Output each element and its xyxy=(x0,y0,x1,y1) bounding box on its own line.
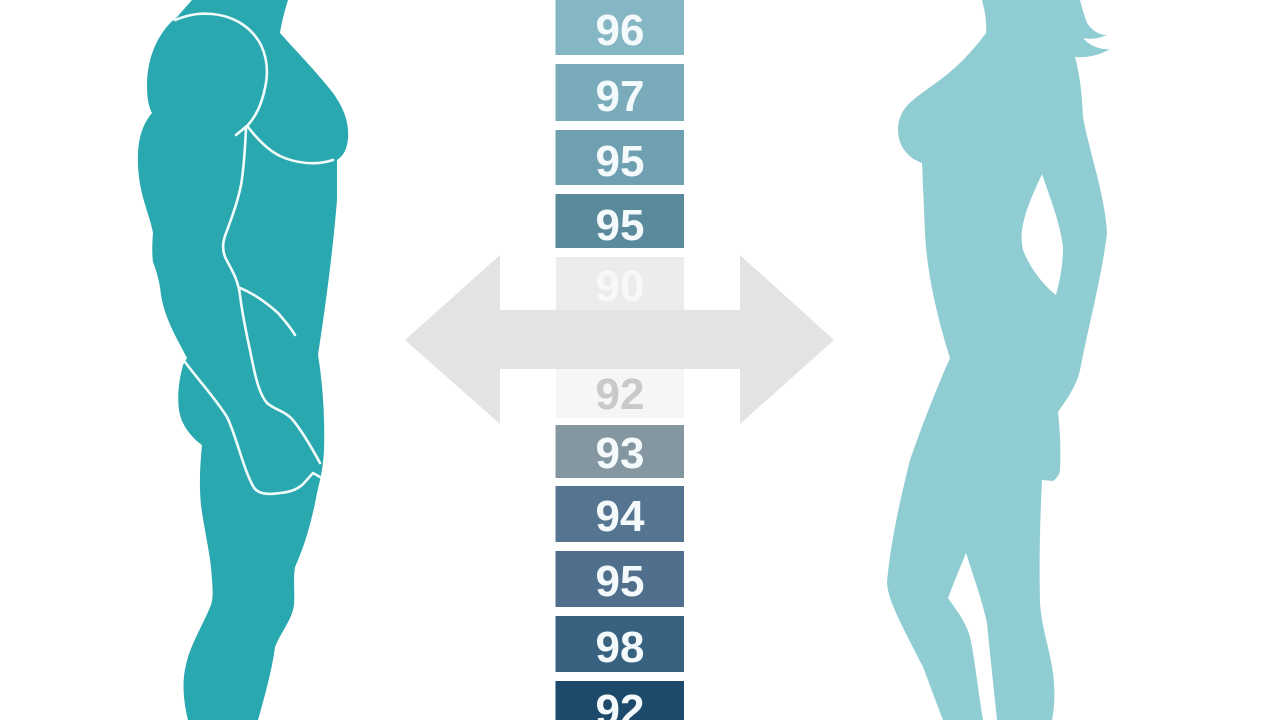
bar 92 navy xyxy=(556,681,684,720)
bar 95 dark xyxy=(556,194,684,250)
body contour lines xyxy=(175,14,333,494)
bar 95 blue xyxy=(556,551,684,607)
bar 97: 97 xyxy=(596,72,644,121)
bar 95 blue: 95 xyxy=(596,557,644,606)
double-headed arrow xyxy=(405,255,834,424)
bar 96: 96 xyxy=(596,6,644,55)
bar 94: 94 xyxy=(596,492,645,541)
bar 95: 95 xyxy=(596,137,644,186)
silhouette body xyxy=(138,0,348,720)
figure: slim body silhouette xyxy=(887,0,1110,720)
bar 98: 98 xyxy=(596,623,644,672)
bar 96 xyxy=(556,0,684,55)
bar 93 xyxy=(556,425,684,478)
bar 97 xyxy=(556,64,684,121)
score column xyxy=(556,0,684,720)
bar 98 xyxy=(556,616,684,672)
bar 95 dark: 95 xyxy=(596,201,644,250)
bar 95 xyxy=(556,130,684,186)
bar 90 faded xyxy=(556,257,684,312)
figure: larger body silhouette xyxy=(138,0,348,720)
bar 94 xyxy=(556,486,684,542)
bar 90 faded: 90 xyxy=(596,262,644,311)
bar 92 faded xyxy=(556,368,684,419)
bar 93: 93 xyxy=(596,429,644,478)
bar 92 faded: 92 xyxy=(596,370,644,419)
